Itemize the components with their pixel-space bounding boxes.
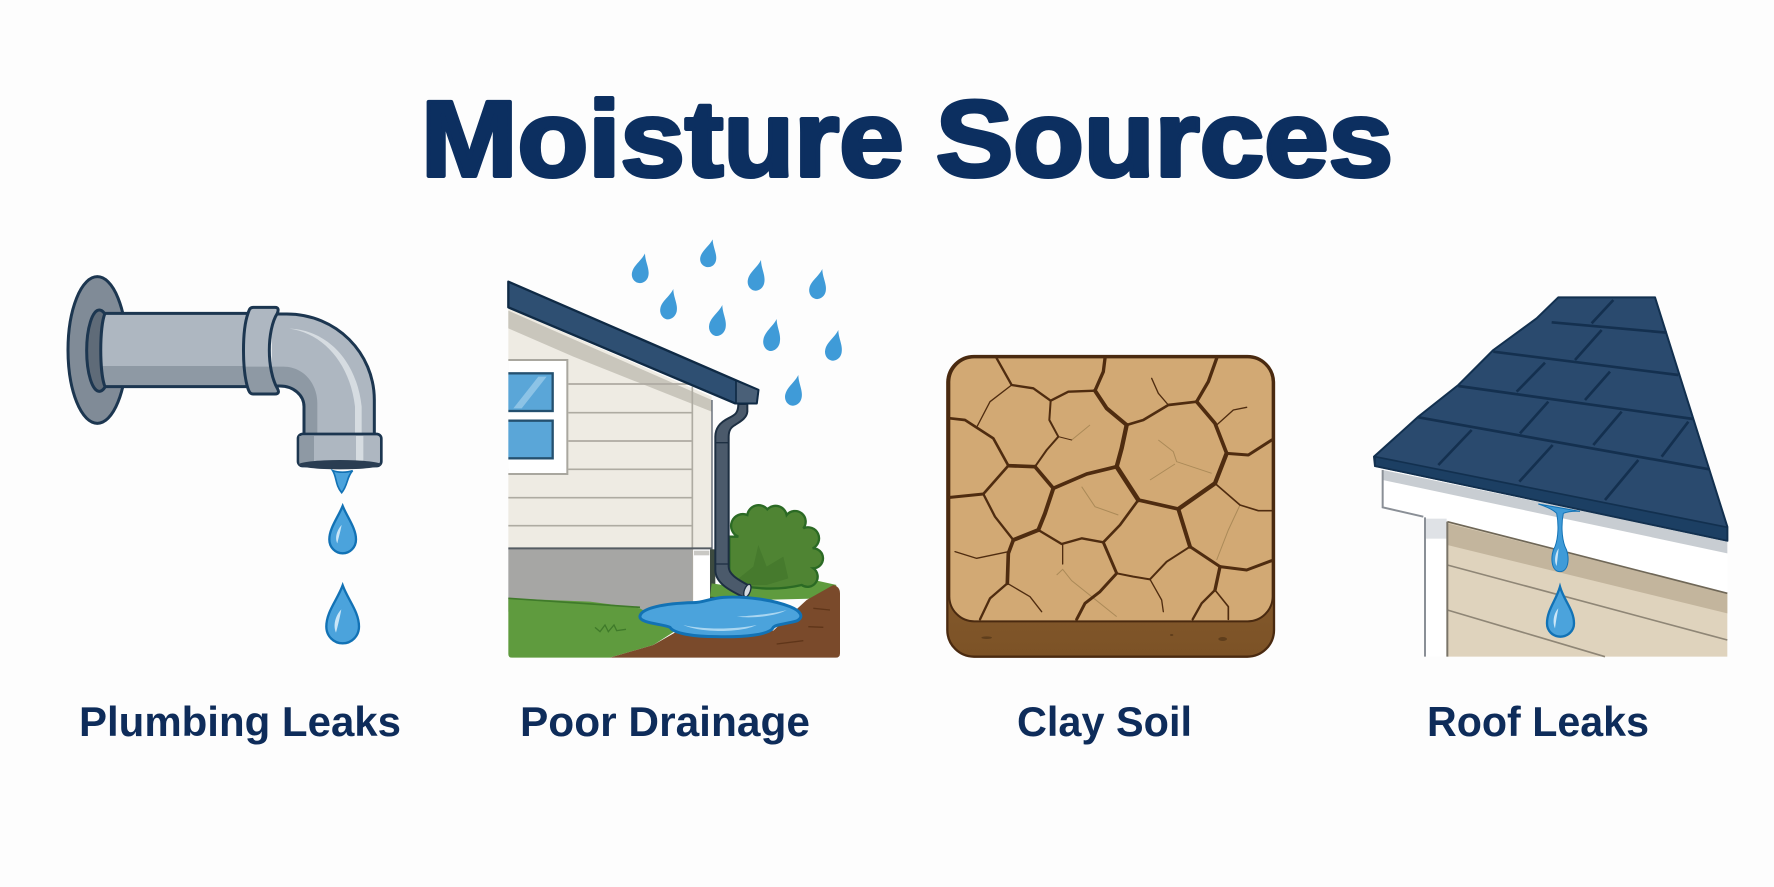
icon: poor drainage house (490, 238, 846, 658)
label: poor drainage: Poor Drainage (520, 698, 810, 745)
shingled roof (1374, 297, 1727, 541)
pipe nozzle (298, 434, 381, 469)
soil side flecks (981, 634, 1227, 641)
soil block side (947, 356, 1274, 657)
label: plumbing leaks: Plumbing Leaks (79, 698, 401, 745)
falling drop (1547, 587, 1574, 637)
house foundation (508, 548, 715, 612)
water drip from roof edge (1538, 504, 1580, 572)
pipe collar (243, 307, 278, 394)
faint hairline cracks (1057, 425, 1240, 617)
title: Moisture Sources (421, 78, 1393, 199)
icon: cracked clay soil (947, 356, 1274, 657)
corner post (1425, 517, 1447, 657)
soil block top (949, 357, 1273, 621)
soil cracks (950, 358, 1272, 619)
house window (490, 360, 567, 474)
icon: leaking roof (1374, 297, 1727, 657)
siding wall (1447, 522, 1727, 657)
label: clay soil: Clay Soil (1017, 698, 1192, 745)
rain drops (630, 238, 846, 407)
label: roof leaks: Roof Leaks (1427, 698, 1649, 745)
pipe elbow (272, 314, 374, 434)
ground: grass and soil (508, 578, 840, 658)
roof (508, 282, 758, 403)
pipe body (101, 313, 250, 387)
puddle (640, 597, 801, 637)
pipe flange (68, 277, 127, 423)
house wall (508, 308, 712, 602)
bush (729, 505, 823, 589)
downspout (715, 404, 752, 598)
water drips (326, 471, 359, 643)
icon: leaking pipe (68, 277, 381, 643)
fascia board (1383, 470, 1727, 593)
